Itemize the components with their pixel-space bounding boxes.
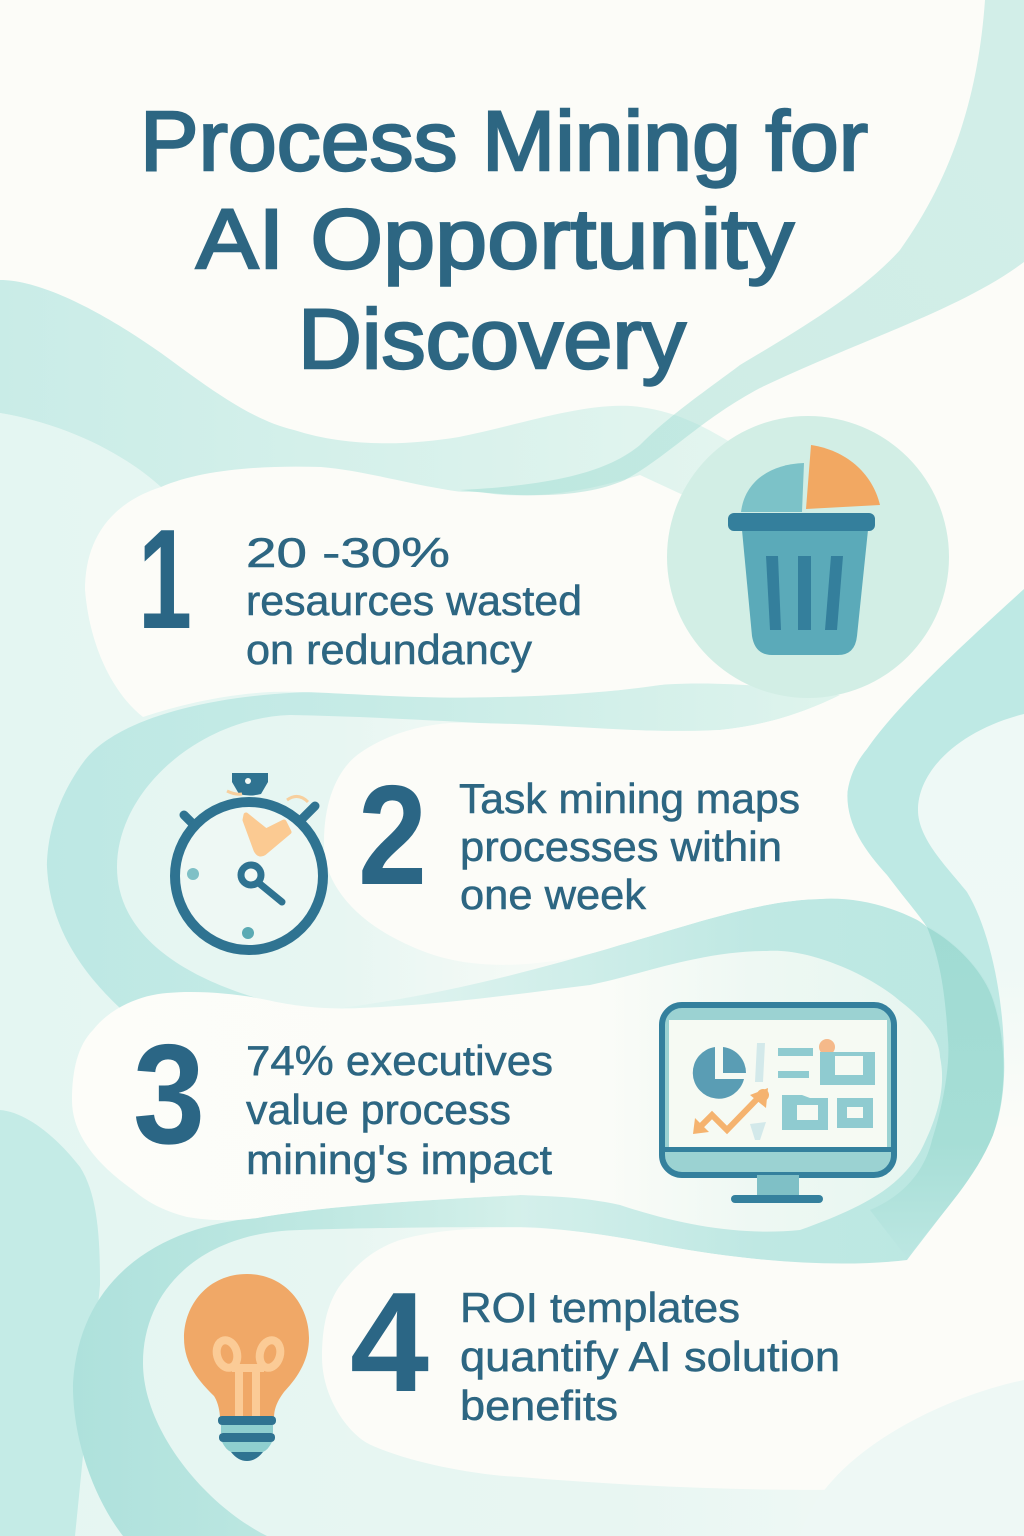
step 2 number: 2 <box>358 756 427 915</box>
band around bulb <box>73 1195 521 1536</box>
band around stopwatch <box>47 684 840 1012</box>
step 3 text: value process <box>246 1086 511 1133</box>
step 1 text <box>246 529 582 673</box>
step 2 text: one week <box>460 871 647 918</box>
step 3 text: 74% executives <box>246 1037 553 1084</box>
step 2 text: Task mining maps <box>459 775 800 822</box>
title: Process Mining for <box>140 94 868 188</box>
overlap of strip and band <box>870 927 1004 1258</box>
step 1 text: on redundancy <box>246 626 532 673</box>
step 4 text: ROI templates <box>460 1284 740 1331</box>
title <box>140 94 868 386</box>
step 4 text: benefits <box>460 1382 618 1429</box>
icon: stopwatch <box>175 773 323 950</box>
step 1 text: resaurces wasted <box>246 577 582 624</box>
step 3 number: 3 <box>133 1015 205 1174</box>
step 3 text <box>246 1037 553 1183</box>
icon: trash can with pie slice <box>667 416 949 698</box>
icon: monitor dashboard <box>662 1005 894 1203</box>
panel 2 background <box>324 695 927 965</box>
ribbon from top right <box>460 0 1024 495</box>
step 2 text <box>459 775 800 918</box>
title: Discovery <box>298 292 686 386</box>
step 4 text: quantify AI solution <box>460 1333 840 1380</box>
panel 3 background <box>72 951 942 1232</box>
step 1 number: 1 <box>138 500 192 659</box>
step 3 text: mining's impact <box>246 1136 552 1183</box>
step 4 text <box>460 1284 840 1429</box>
title: AI Opportunity <box>196 192 794 286</box>
panel 1 background <box>85 467 780 717</box>
step 1 text: 20 -30% <box>246 529 450 576</box>
panel 4 background <box>322 1225 1024 1490</box>
band around monitor <box>320 899 1004 1264</box>
bottom right blob <box>800 1380 1024 1536</box>
icon: light bulb <box>184 1274 309 1461</box>
step 2 text: processes within <box>460 823 782 870</box>
step 4 number: 4 <box>350 1263 429 1422</box>
